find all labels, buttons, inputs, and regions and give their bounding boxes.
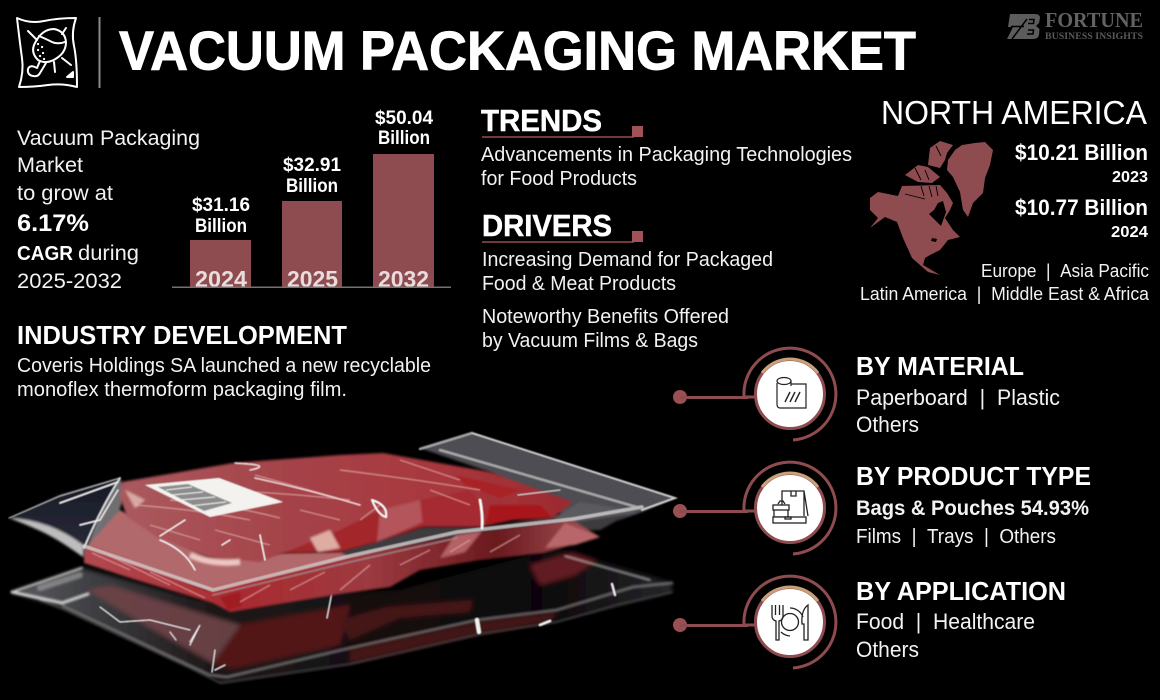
photo: vacuum sealed meat bag with reflection bbox=[9, 433, 675, 683]
reflection bbox=[12, 548, 672, 683]
divider bbox=[98, 17, 100, 88]
value labels: Billion bbox=[378, 128, 430, 149]
segment: by application bbox=[673, 576, 1066, 668]
icon: film roll bbox=[673, 348, 836, 440]
bar 2025 bbox=[282, 201, 342, 287]
panel: trends bbox=[481, 104, 852, 190]
icon: plate and cutlery bbox=[673, 576, 836, 668]
value labels: $50.04 bbox=[375, 108, 433, 129]
icon: vacuum-sealed food bag bbox=[17, 18, 77, 87]
panel: drivers: by Vacuum Films & Bags bbox=[482, 330, 698, 352]
CAGR text block: 2025-2032 bbox=[17, 270, 122, 293]
segment: by material: BY MATERIAL bbox=[856, 351, 1024, 381]
value labels: Billion bbox=[286, 176, 338, 197]
panel: north america: 2023 bbox=[1112, 169, 1148, 186]
panel: drivers: Increasing Demand for Packaged bbox=[482, 249, 773, 271]
value labels bbox=[192, 108, 433, 237]
title: VACUUM PACKAGING MARKET bbox=[119, 20, 916, 82]
panel: north america: Latin America | Middle East & Africa bbox=[860, 284, 1150, 304]
panel: trends: TRENDS bbox=[481, 104, 602, 138]
panel: trends: for Food Products bbox=[481, 168, 637, 190]
bag film bbox=[9, 433, 675, 592]
year labels: 2032 bbox=[378, 266, 429, 292]
segment: by material bbox=[673, 348, 1060, 440]
panel: drivers bbox=[482, 209, 773, 352]
upper meat layer bbox=[120, 453, 573, 563]
CAGR text block: during bbox=[78, 242, 139, 265]
segment: by product type bbox=[673, 461, 1091, 554]
panel: drivers: DRIVERS bbox=[482, 209, 612, 243]
segment: by product type: Films | Trays | Others bbox=[856, 526, 1056, 548]
CAGR text block: Vacuum Packaging bbox=[17, 127, 200, 150]
map: north america bbox=[870, 141, 993, 275]
panel: industry development bbox=[17, 320, 431, 401]
bar 2032 bbox=[373, 154, 434, 287]
product label bbox=[145, 478, 283, 517]
bar 2024 bbox=[190, 240, 251, 287]
logo: Fortune Business Insights: BUSINESS INSIGHTS bbox=[1045, 32, 1143, 42]
panel: drivers: Food & Meat Products bbox=[482, 273, 676, 295]
logo: Fortune Business Insights: FORTUNE bbox=[1045, 8, 1143, 32]
panel: north america bbox=[860, 94, 1150, 304]
year labels bbox=[196, 271, 428, 286]
segment: by material: Paperboard | Plastic bbox=[856, 385, 1060, 410]
panel: north america: Europe | Asia Pacific bbox=[981, 261, 1149, 281]
panel: trends: Advancements in Packaging Technologies bbox=[481, 144, 852, 166]
bar chart: market size bbox=[172, 108, 451, 292]
CAGR text block: 6.17% bbox=[17, 210, 89, 237]
CAGR text block: Market bbox=[17, 154, 83, 177]
segment: by application: BY APPLICATION bbox=[856, 576, 1066, 606]
segment: by product type: Bags & Pouches 54.93% bbox=[856, 497, 1089, 520]
panel: industry development: Coveris Holdings SA launched a new recyclable bbox=[17, 355, 431, 377]
CAGR text block: CAGR bbox=[17, 243, 74, 265]
segment: by application: Food | Healthcare bbox=[856, 609, 1035, 634]
CAGR text block: to grow at bbox=[17, 182, 113, 205]
value labels: $31.16 bbox=[192, 195, 250, 216]
panel: industry development: INDUSTRY DEVELOPMENT bbox=[17, 320, 347, 350]
panel: north america: NORTH AMERICA bbox=[881, 94, 1147, 131]
logo: Fortune Business Insights bbox=[1007, 8, 1143, 42]
year labels: 2024 bbox=[195, 266, 247, 292]
segment: by product type: BY PRODUCT TYPE bbox=[856, 461, 1091, 491]
segment: by application: Others bbox=[856, 637, 919, 662]
panel: drivers: Noteworthy Benefits Offered bbox=[482, 306, 729, 328]
panel: north america: $10.21 Billion bbox=[1015, 140, 1148, 165]
CAGR text block bbox=[17, 127, 200, 293]
segment: by material: Others bbox=[856, 412, 919, 437]
panel: north america: 2024 bbox=[1111, 224, 1148, 241]
value labels: Billion bbox=[195, 216, 247, 237]
year labels: 2025 bbox=[287, 266, 338, 292]
icon: boxes and trays bbox=[673, 462, 836, 554]
panel: north america: $10.77 Billion bbox=[1015, 195, 1148, 220]
panel: industry development: monoflex thermoform packaging film. bbox=[17, 379, 347, 401]
value labels: $32.91 bbox=[283, 155, 341, 176]
lower meat layer bbox=[84, 520, 600, 612]
seal and highlights bbox=[9, 433, 675, 595]
